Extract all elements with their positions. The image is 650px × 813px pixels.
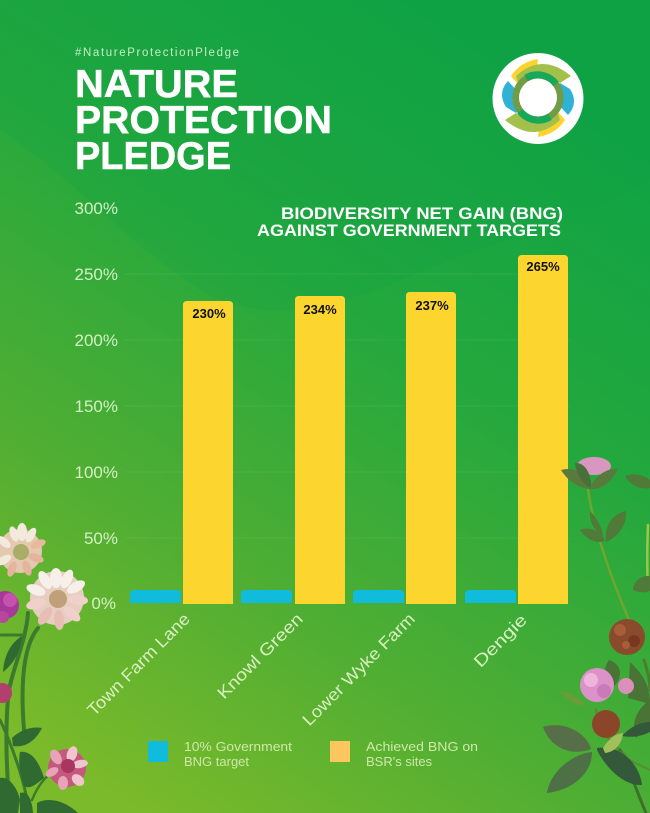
y axis labels: 50% xyxy=(84,529,118,548)
right leaves xyxy=(580,474,650,592)
left flower magenta xyxy=(0,591,19,623)
left flower pink edge xyxy=(0,683,12,703)
chart heading: AGAINST GOVERNMENT TARGETS xyxy=(257,222,561,240)
x axis labels: Lower Wyke Farm xyxy=(299,609,419,730)
left flower top xyxy=(0,523,47,578)
x axis labels: Dengie xyxy=(470,610,531,671)
bar chart xyxy=(75,199,570,730)
legend: government target: BNG target xyxy=(184,754,249,769)
target bars xyxy=(130,590,516,603)
y axis labels: 200% xyxy=(75,331,118,350)
legend xyxy=(148,739,478,769)
icon: BSR logo xyxy=(492,53,584,144)
legend: achieved BNG: Achieved BNG on xyxy=(366,739,478,754)
left flower large xyxy=(25,568,88,630)
y axis labels: 100% xyxy=(75,463,118,482)
left flower bottom xyxy=(44,745,89,790)
chart heading xyxy=(257,205,563,240)
y axis labels: 150% xyxy=(75,397,118,416)
bar values: 237% xyxy=(415,298,449,313)
x axis labels xyxy=(84,609,531,730)
hashtag: #NatureProtectionPledge xyxy=(75,47,239,59)
flowers: left clover xyxy=(0,523,89,813)
legend: achieved BNG xyxy=(330,739,478,769)
chart heading: BIODIVERSITY NET GAIN (BNG) xyxy=(281,205,563,223)
bar values: 234% xyxy=(303,302,337,317)
right flower top xyxy=(561,457,618,489)
title: PLEDGE xyxy=(75,135,231,178)
x axis labels: Knowl Green xyxy=(213,609,307,703)
right lower leaves xyxy=(543,660,650,793)
bar values: 230% xyxy=(192,306,226,321)
y axis labels: 300% xyxy=(75,199,118,218)
right flower brown xyxy=(592,710,620,738)
title xyxy=(75,63,332,178)
achieved bars xyxy=(183,255,568,604)
y axis labels: 0% xyxy=(91,594,116,613)
title: NATURE xyxy=(75,63,238,106)
legend: achieved BNG: BSR's sites xyxy=(366,754,433,769)
title: PROTECTION xyxy=(75,99,332,142)
x axis labels: Town Farm Lane xyxy=(84,609,194,720)
right flower seed head xyxy=(609,619,645,655)
right flower pink xyxy=(580,668,634,702)
bar values: 265% xyxy=(526,259,560,274)
y axis labels xyxy=(75,199,118,613)
y axis labels: 250% xyxy=(75,265,118,284)
legend: government target xyxy=(148,739,292,769)
bar values xyxy=(192,259,560,321)
legend: government target: 10% Government xyxy=(184,739,292,754)
flowers: right clover xyxy=(543,457,650,813)
